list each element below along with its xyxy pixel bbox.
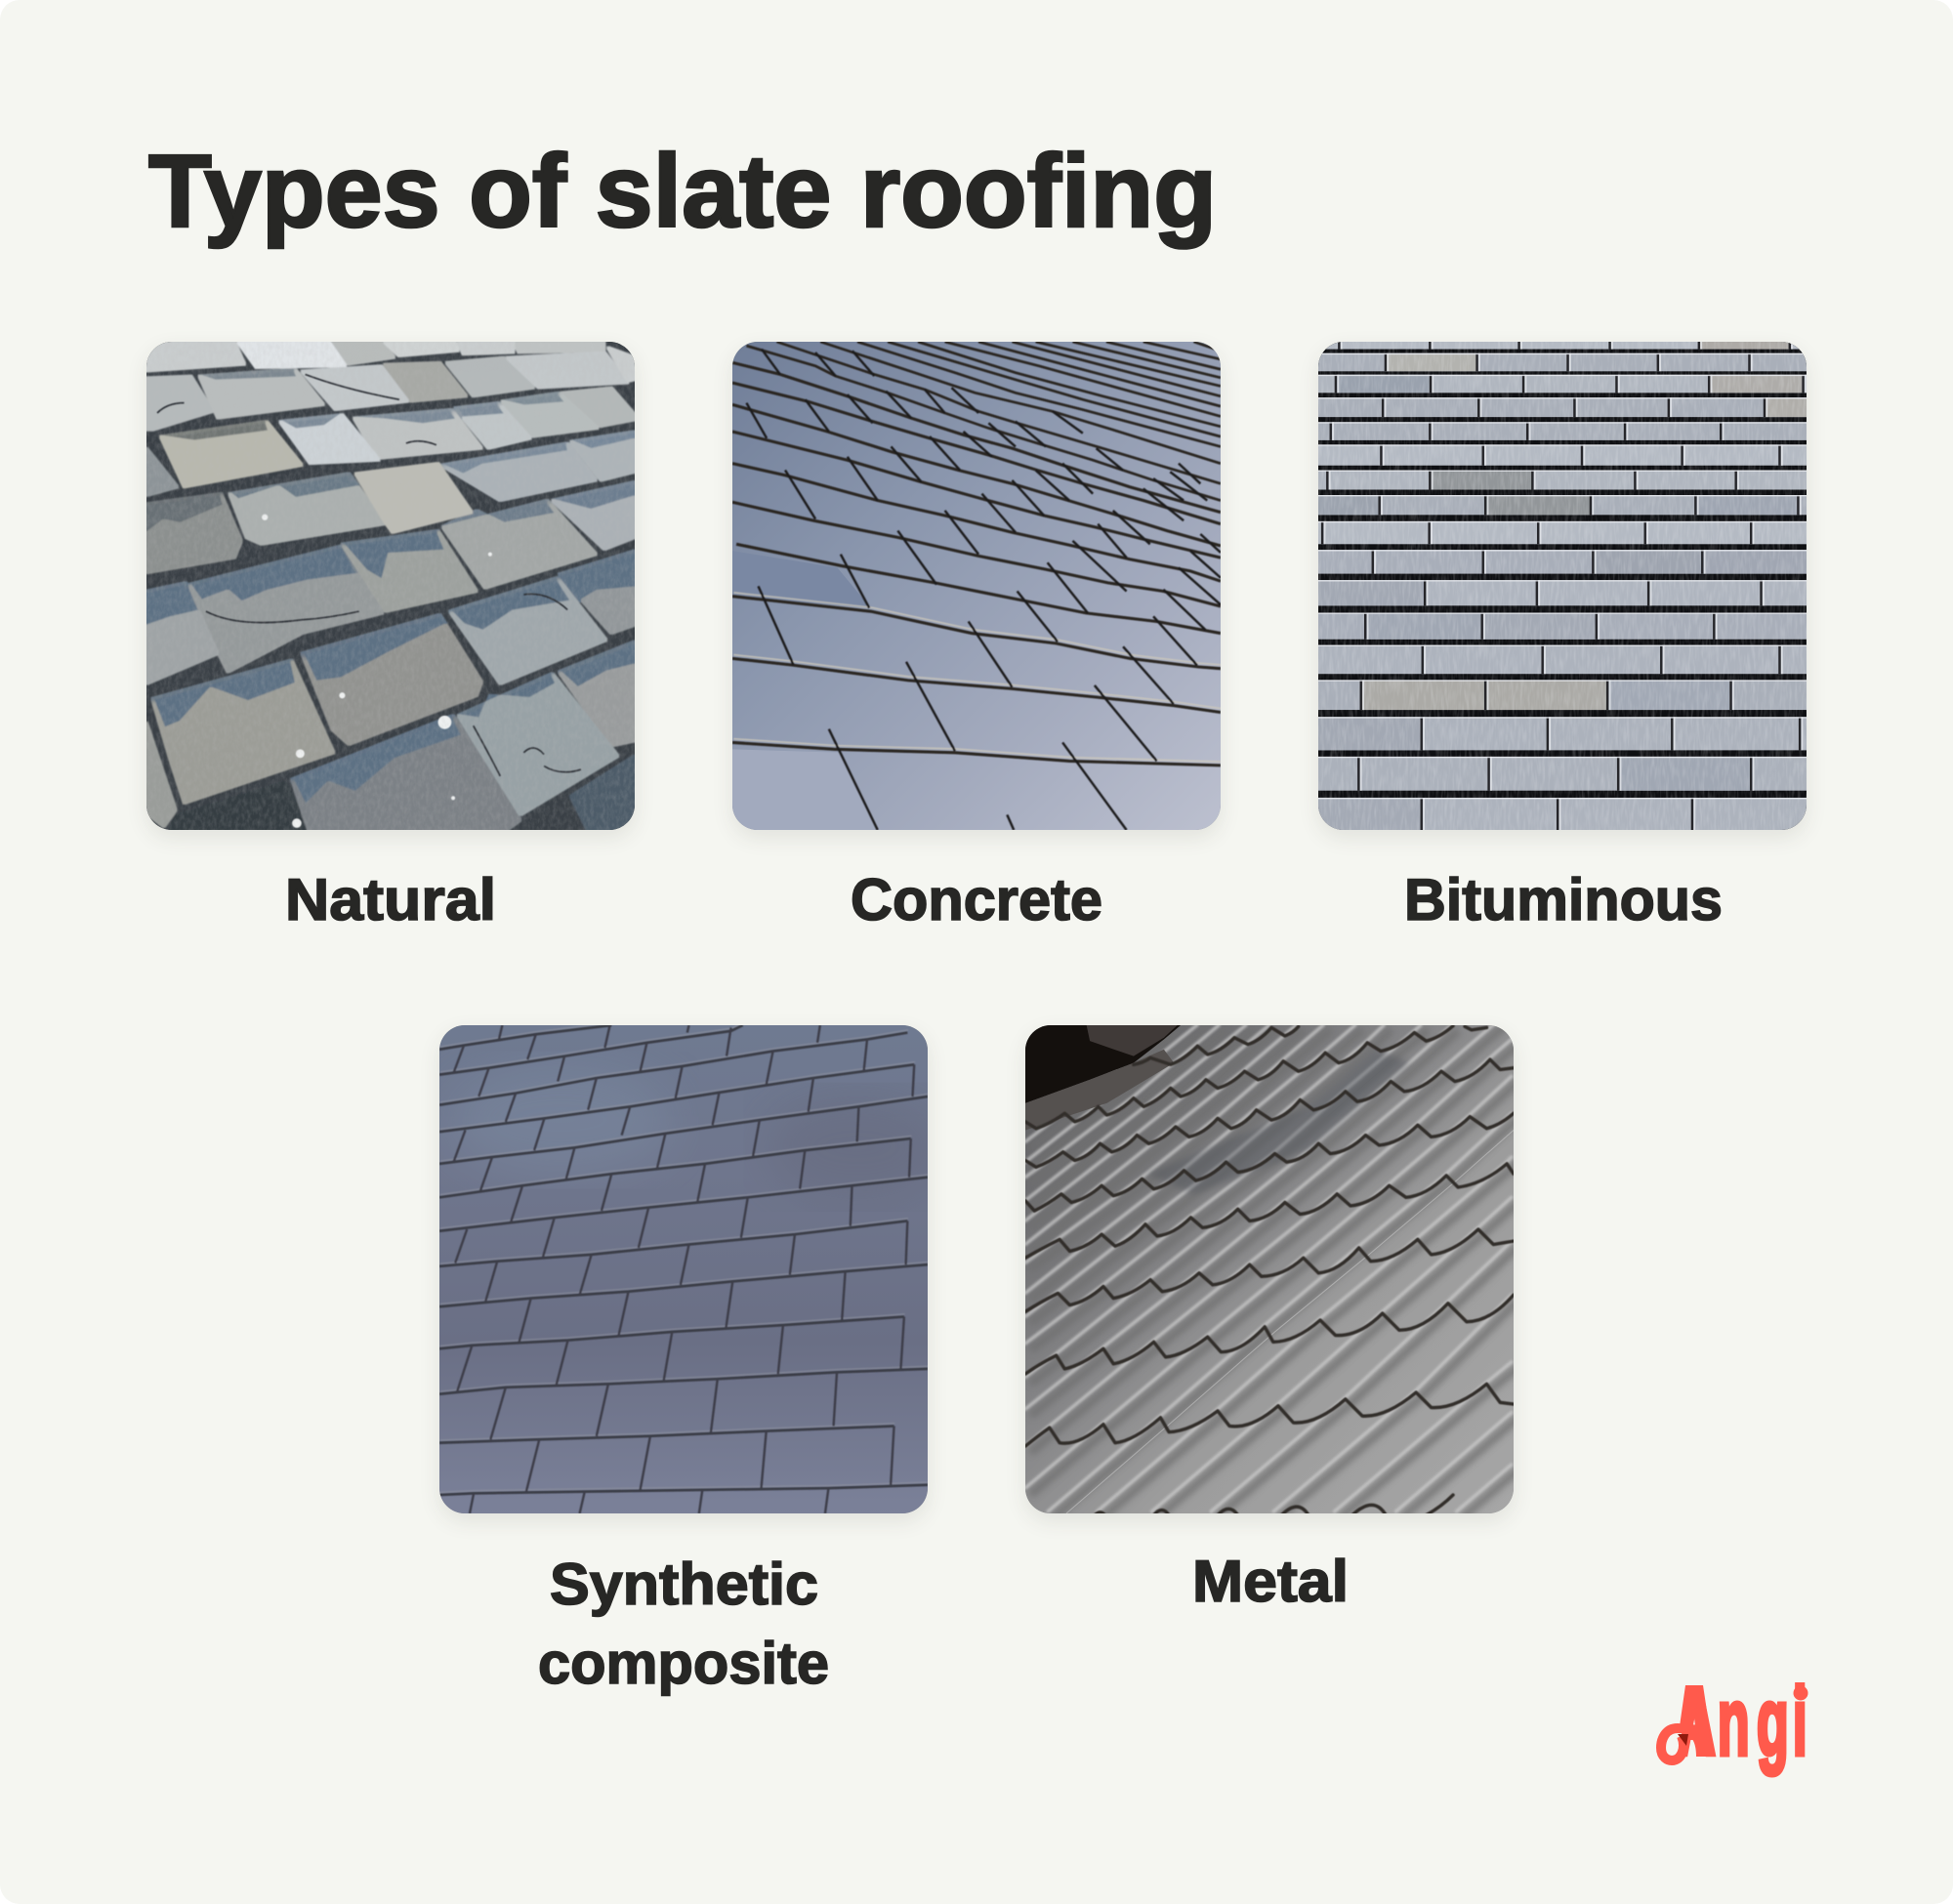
seams [1066,1130,1514,1513]
dark band upper [1147,1050,1409,1194]
label: synthetic composite: Synthetic [550,1552,818,1617]
cracks [157,374,581,776]
label: synthetic composite [538,1552,829,1696]
lichen dots [262,515,492,828]
photo: concrete slate [732,342,1221,830]
photo: bituminous slate [1318,342,1807,830]
photo: metal slate [1025,1025,1514,1513]
joint highlights [1325,342,1806,830]
tile colour variations [1318,342,1807,830]
title: Types of slate roofing [148,134,1217,249]
label: natural: Natural [285,867,496,932]
label: bituminous: Bituminous [1404,867,1723,932]
logo: Angi: Angi [1678,1668,1808,1775]
photo: natural slate [146,342,635,830]
tile step lines [1025,1026,1514,1515]
wet patches [146,369,635,807]
photo: synthetic composite slate [439,1025,928,1513]
label: metal: Metal [1192,1549,1349,1614]
joints [1322,342,1804,830]
eaves, top left [1025,1025,1181,1103]
label: synthetic composite: composite [538,1631,829,1696]
label: concrete: Concrete [851,867,1102,932]
highlights [1318,353,1807,799]
